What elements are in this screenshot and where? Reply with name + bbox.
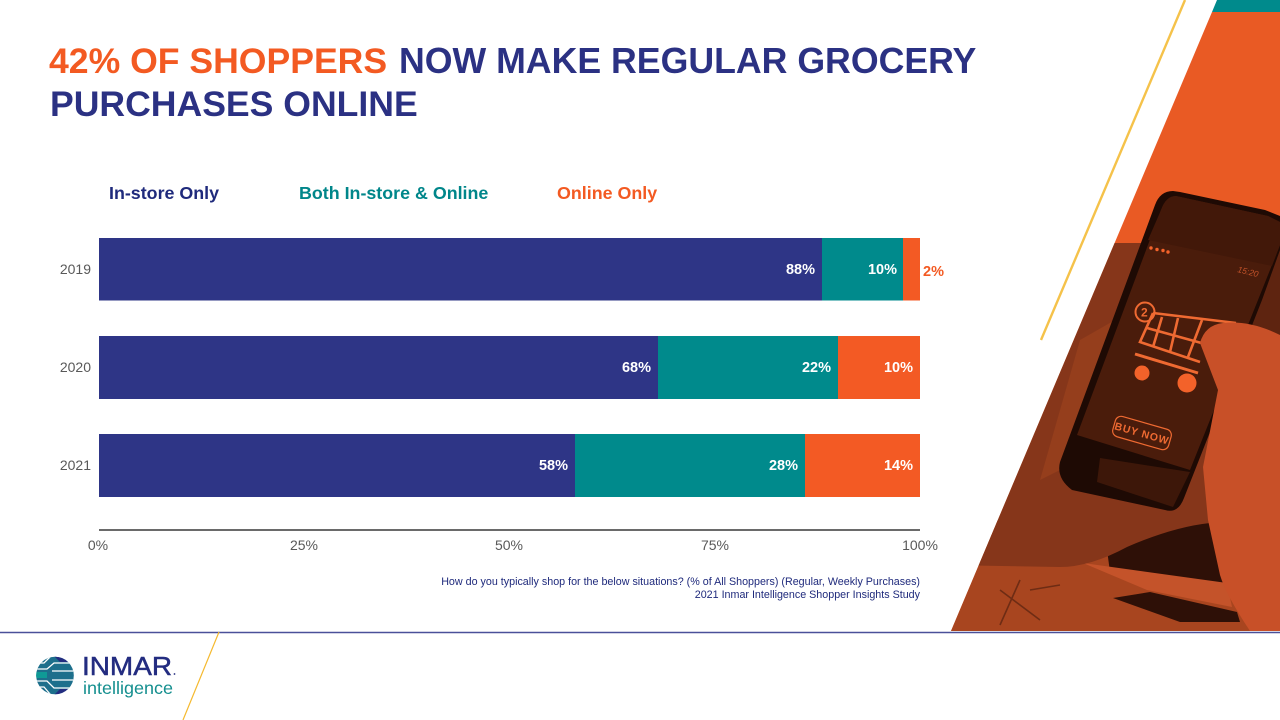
source note: 2021 Inmar Intelligence Shopper Insights Study <box>695 589 921 601</box>
title: 42% OF SHOPPERS <box>49 41 387 81</box>
buy now button: BUY NOW <box>1113 420 1170 447</box>
cart icon: 2 <box>1141 306 1148 320</box>
logo: Inmar Intelligence <box>36 656 176 698</box>
bar: 2019: 10% <box>868 262 897 278</box>
title: NOW MAKE REGULAR GROCERY <box>399 41 977 81</box>
title: PURCHASES ONLINE <box>50 84 418 124</box>
yellow diagonal accent <box>1041 0 1185 340</box>
year labels: 2021 <box>60 457 91 473</box>
phone body <box>1059 191 1280 511</box>
legend: Online Only <box>557 183 657 203</box>
logo wordmark: INMAR <box>82 651 172 681</box>
stacked bar chart <box>60 238 944 553</box>
x axis: 100% <box>902 537 938 553</box>
left hand <box>978 243 1210 567</box>
x axis: 25% <box>290 537 318 553</box>
footer yellow diagonal <box>183 632 219 720</box>
phone top band <box>1148 212 1279 266</box>
year labels: 2019 <box>60 261 91 277</box>
logo globe mark <box>36 656 74 696</box>
cart icon <box>1134 302 1236 392</box>
table and background <box>951 520 1250 631</box>
source note: How do you typically shop for the below situations? (% of All Shoppers) (Regular, Weekly Purchases) <box>441 576 920 588</box>
legend: In-store Only <box>109 183 219 203</box>
bar: 2020: 22% <box>802 360 831 376</box>
x axis: 50% <box>495 537 523 553</box>
bar: 2019: 88% <box>786 262 815 278</box>
footer rule <box>0 632 1280 634</box>
phone lower bezel <box>1097 458 1190 507</box>
x axis <box>88 530 938 553</box>
bar: 2021 <box>99 434 920 497</box>
bar: 2019 <box>99 238 944 300</box>
finger and right hand <box>1200 322 1280 631</box>
phone screen <box>1077 196 1280 470</box>
bar: 2020 <box>99 336 920 399</box>
photo panel: hand holding phone <box>940 0 1280 640</box>
bar: 2019: 2% <box>923 264 944 280</box>
x axis: 0% <box>88 537 108 553</box>
buy now button <box>1111 415 1173 451</box>
year labels <box>60 261 91 473</box>
status dots <box>1149 246 1170 254</box>
bar: 2020: 10% <box>884 360 913 376</box>
logo sub-wordmark: intelligence <box>83 678 173 698</box>
year labels: 2020 <box>60 359 91 375</box>
legend <box>109 183 657 203</box>
bar: 2021: 14% <box>884 458 913 474</box>
bar: 2021: 28% <box>769 458 798 474</box>
background behind phone <box>1252 250 1280 335</box>
title <box>49 41 977 124</box>
bar: 2021: 58% <box>539 458 568 474</box>
source note <box>441 576 921 601</box>
x axis: 75% <box>701 537 729 553</box>
legend: Both In-store & Online <box>299 183 488 203</box>
clock: 15:20 <box>1237 264 1260 279</box>
logo registered dot <box>174 673 175 675</box>
bar: 2020: 68% <box>622 360 651 376</box>
teal corner band <box>1212 0 1280 12</box>
